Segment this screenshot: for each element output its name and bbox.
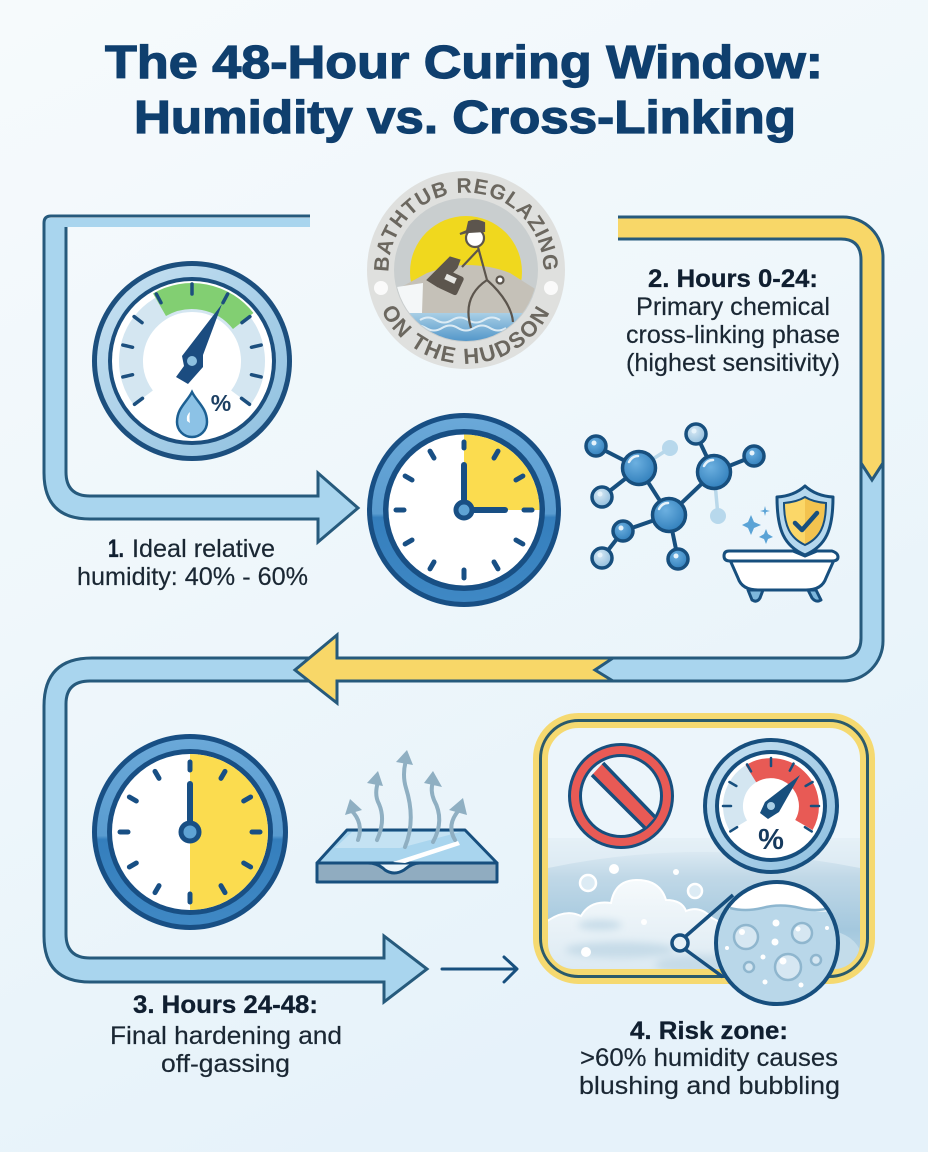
- title: The 48-Hour Curing Window:: [105, 36, 823, 88]
- sparkles: [742, 506, 773, 544]
- caption 2: [626, 265, 840, 377]
- caption 2: 2. Hours 0-24:: [648, 265, 818, 293]
- shield: [777, 486, 833, 555]
- caption 1: 1.: [108, 535, 124, 563]
- caption 3: off-gassing: [161, 1050, 290, 1078]
- icon: off-gassing surface: [317, 750, 497, 882]
- percent sign: %: [758, 824, 784, 856]
- caption 3: Final hardening and: [110, 1022, 342, 1050]
- caption 4: [579, 1017, 840, 1100]
- small arrow to risk zone: [442, 957, 517, 982]
- caption 1: humidity: 40% - 60%: [77, 563, 308, 591]
- gauge 2: high humidity: [703, 738, 839, 874]
- rising vapor arrows: [351, 760, 459, 847]
- caption 2: Primary chemical: [636, 293, 830, 321]
- bathtub: [724, 551, 838, 601]
- panel: risk zone: [540, 720, 868, 1004]
- caption 2: cross-linking phase: [626, 321, 840, 349]
- arrow 3 yellow section with head: [295, 635, 614, 703]
- molecule illustration: [586, 424, 764, 569]
- arrow 3: blue path along the left: [44, 635, 614, 1002]
- logo: Bathtub Reglazing on the Hudson: [367, 171, 565, 369]
- title: [105, 36, 823, 143]
- logo: Bathtub Reglazing on the Hudson: ON THE HUDSON: [384, 306, 550, 364]
- logo figure: man spraying: [427, 221, 513, 328]
- clock 1: hours 0-24, quarter filled: [367, 413, 561, 607]
- arrow 2 yellow section: [618, 217, 883, 480]
- caption 4: >60% humidity causes: [580, 1044, 838, 1072]
- icon: water drop: [177, 392, 207, 437]
- caption 2: (highest sensitivity): [626, 349, 840, 377]
- icon: bathtub with shield: [724, 486, 838, 601]
- caption 4: blushing and bubbling: [579, 1072, 840, 1100]
- gauge 2 needle: [760, 775, 800, 819]
- magnifier: bubbles in coating: [672, 880, 840, 1004]
- gauge 1: ideal humidity: [92, 261, 292, 461]
- percent sign: %: [211, 390, 231, 416]
- clock 2 hand: [181, 784, 199, 841]
- clock 1 hands: [456, 465, 505, 518]
- title: Humidity vs. Cross-Linking: [134, 91, 796, 143]
- clock 2: hours 24-48, half filled: [92, 734, 288, 930]
- caption 1: Ideal relative: [132, 535, 275, 563]
- arrow 2: yellow then blue, right side: [595, 217, 883, 681]
- caption 3: 3. Hours 24-48:: [133, 991, 318, 1019]
- caption 1: [77, 535, 308, 591]
- logo: Bathtub Reglazing on the Hudson: BATHTUB REGLAZING: [374, 178, 558, 271]
- caption 3: [110, 991, 342, 1078]
- humid scene with clouds: [546, 838, 860, 975]
- gauge 1 needle: [176, 304, 222, 384]
- caption 4: 4. Risk zone:: [630, 1017, 788, 1045]
- yellow frame center line: [540, 720, 868, 976]
- icon: prohibition sign: [575, 750, 667, 842]
- arrow 1: blue path to clock: [44, 216, 358, 542]
